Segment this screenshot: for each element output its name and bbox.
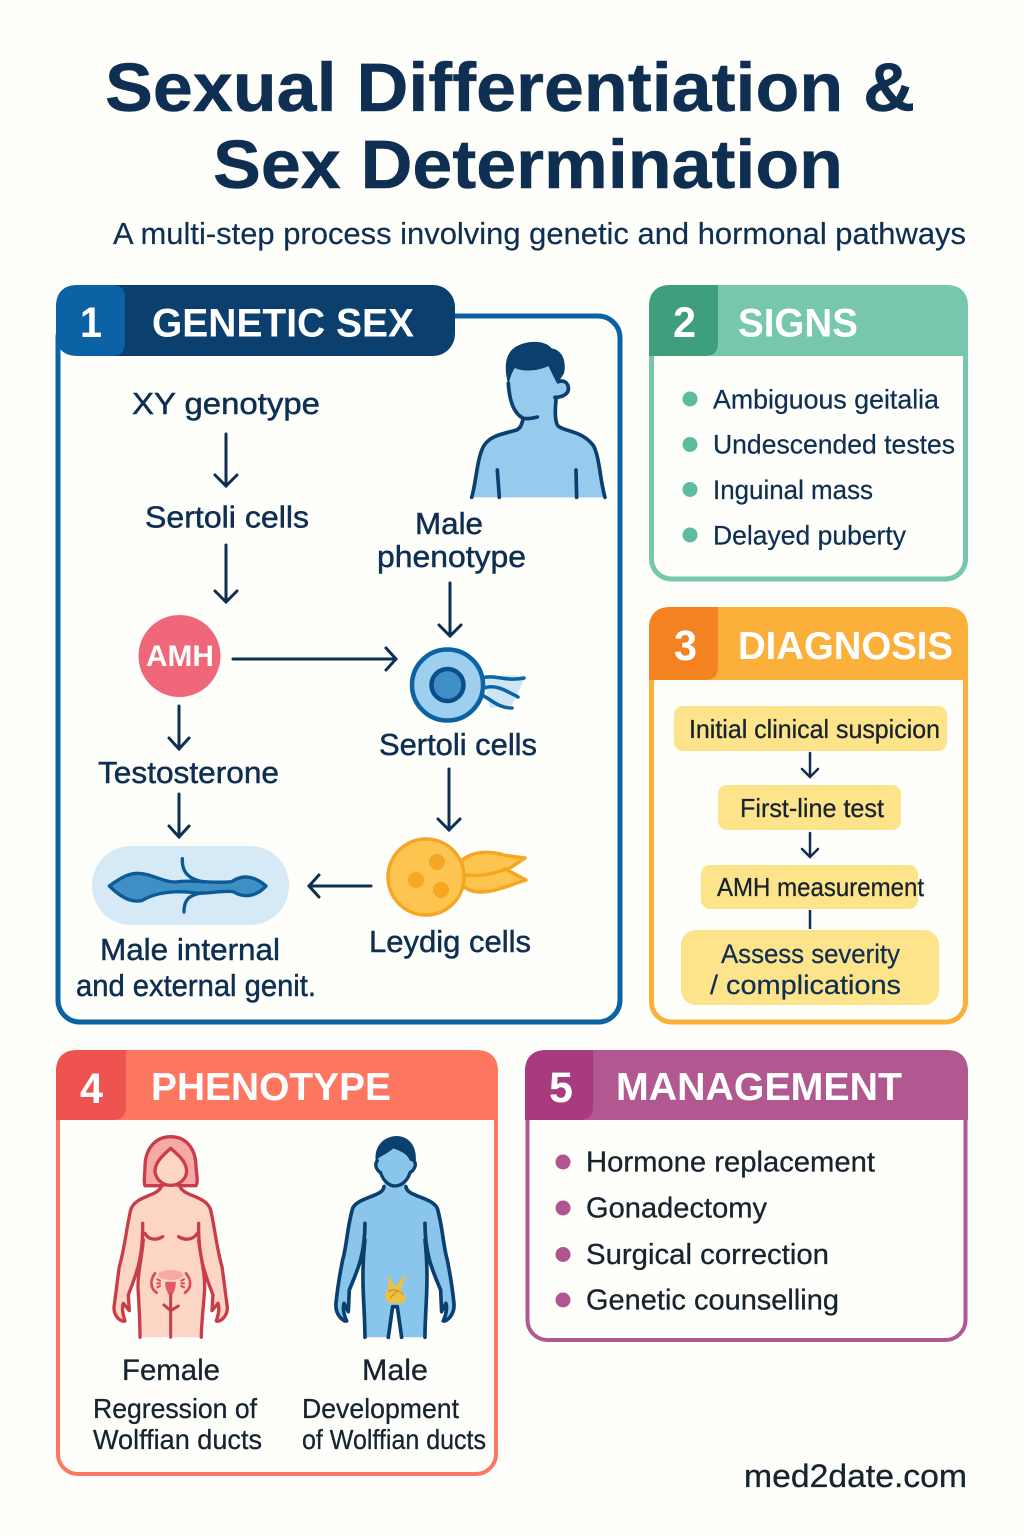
icon: female figure bbox=[114, 1137, 227, 1337]
header: genetic sex bbox=[56, 285, 455, 356]
label: female bbox=[93, 1354, 262, 1455]
title: Sexual Differentiation & bbox=[105, 49, 915, 126]
header: management: MANAGEMENT bbox=[616, 1066, 902, 1109]
list: management: Surgical correction bbox=[586, 1239, 829, 1271]
label: male bbox=[302, 1354, 486, 1455]
step: first-line test bbox=[718, 785, 901, 830]
header: management bbox=[525, 1050, 968, 1120]
header: signs: SIGNS bbox=[738, 302, 858, 346]
header: signs bbox=[649, 285, 968, 356]
list: management: Hormone replacement bbox=[586, 1146, 875, 1178]
arrow: Sertoli to AMH bbox=[215, 545, 237, 602]
panel: diagnosis bbox=[649, 607, 968, 1022]
label: male internal and external genitalia: and external genit. bbox=[76, 968, 316, 1003]
arrow: genotype to Sertoli bbox=[215, 434, 237, 486]
header: phenotype: 4 bbox=[80, 1065, 103, 1113]
header: management: 5 bbox=[549, 1064, 573, 1112]
label: male: Development bbox=[302, 1393, 459, 1424]
arrow: testosterone to genitalia bbox=[169, 794, 189, 837]
step: first-line test: First-line test bbox=[740, 793, 885, 823]
list: management: Gonadectomy bbox=[586, 1192, 767, 1224]
arrow: AMH to testosterone bbox=[169, 706, 189, 749]
header: genetic sex: 1 bbox=[80, 299, 102, 347]
icon: male bust bbox=[472, 342, 605, 497]
arrow: Leydig cell to genitalia bbox=[309, 875, 371, 897]
connector: step three to four bbox=[809, 910, 811, 929]
icon: Sertoli cell bbox=[412, 650, 525, 720]
label: Leydig cells: Leydig cells bbox=[369, 924, 531, 959]
title bbox=[105, 49, 915, 203]
label: male internal and external genitalia: Male internal bbox=[100, 932, 280, 967]
label: male phenotype: Male bbox=[415, 506, 483, 541]
label: female: Regression of bbox=[93, 1393, 257, 1424]
step: AMH measurement bbox=[701, 865, 925, 909]
panel: genetic sex bbox=[56, 285, 620, 1022]
icon: AMH circle: AMH bbox=[146, 640, 214, 673]
arrow: step one to two bbox=[802, 753, 818, 777]
arrow: step two to three bbox=[802, 833, 818, 857]
list: management: Genetic counselling bbox=[586, 1284, 839, 1316]
arrow: phenotype to Sertoli cell bbox=[439, 583, 461, 636]
header: phenotype: PHENOTYPE bbox=[151, 1066, 391, 1109]
icon: Leydig cell bbox=[388, 839, 526, 915]
arrow: AMH to Sertoli cell bbox=[233, 648, 396, 670]
label: XY genotype: XY genotype bbox=[132, 386, 320, 421]
label: Sertoli cells: Sertoli cells bbox=[145, 500, 309, 534]
step: AMH measurement: AMH measurement bbox=[717, 872, 925, 902]
panel: signs bbox=[649, 285, 968, 579]
source credit: med2date.com bbox=[744, 1458, 967, 1494]
step: initial clinical suspicion: Initial clinical suspicion bbox=[689, 714, 940, 744]
header: diagnosis: DIAGNOSIS bbox=[738, 625, 953, 668]
subtitle: A multi-step process involving genetic and hormonal pathways bbox=[113, 216, 966, 251]
label: male: Male bbox=[362, 1354, 428, 1387]
label: male phenotype bbox=[377, 506, 526, 574]
step: initial clinical suspicion bbox=[674, 706, 947, 751]
label: male internal and external genitalia bbox=[76, 932, 316, 1003]
list: management bbox=[556, 1146, 875, 1316]
list: signs: Undescended testes bbox=[713, 430, 955, 460]
step: assess severity bbox=[681, 930, 939, 1005]
header: genetic sex: GENETIC SEX bbox=[152, 302, 414, 346]
header: diagnosis: 3 bbox=[674, 622, 697, 670]
arrow: Sertoli cell to Leydig cell bbox=[438, 769, 460, 830]
panel: phenotype bbox=[56, 1050, 498, 1474]
header: phenotype bbox=[56, 1050, 498, 1120]
list: signs bbox=[682, 384, 955, 550]
header: diagnosis bbox=[649, 607, 968, 680]
icon: male genital tract bbox=[92, 846, 289, 925]
icon: male figure bbox=[336, 1136, 454, 1337]
label: female: Female bbox=[122, 1354, 220, 1387]
panel: management bbox=[525, 1050, 968, 1340]
step: assess severity: / complications bbox=[710, 970, 901, 1000]
list: signs: Delayed puberty bbox=[713, 520, 906, 550]
label: male phenotype: phenotype bbox=[377, 539, 526, 574]
label: Testosterone: Testosterone bbox=[98, 755, 279, 790]
step: assess severity: Assess severity bbox=[721, 939, 900, 969]
title: Sex Determination bbox=[213, 126, 843, 203]
label: Sertoli cells (cell): Sertoli cells bbox=[379, 727, 537, 762]
label: male: of Wolffian ducts bbox=[302, 1424, 486, 1455]
header: signs: 2 bbox=[673, 299, 696, 347]
list: signs: Inguinal mass bbox=[713, 475, 873, 505]
list: signs: Ambiguous geitalia bbox=[713, 384, 940, 414]
label: female: Wolffian ducts bbox=[93, 1424, 262, 1455]
icon: AMH circle bbox=[138, 615, 220, 697]
